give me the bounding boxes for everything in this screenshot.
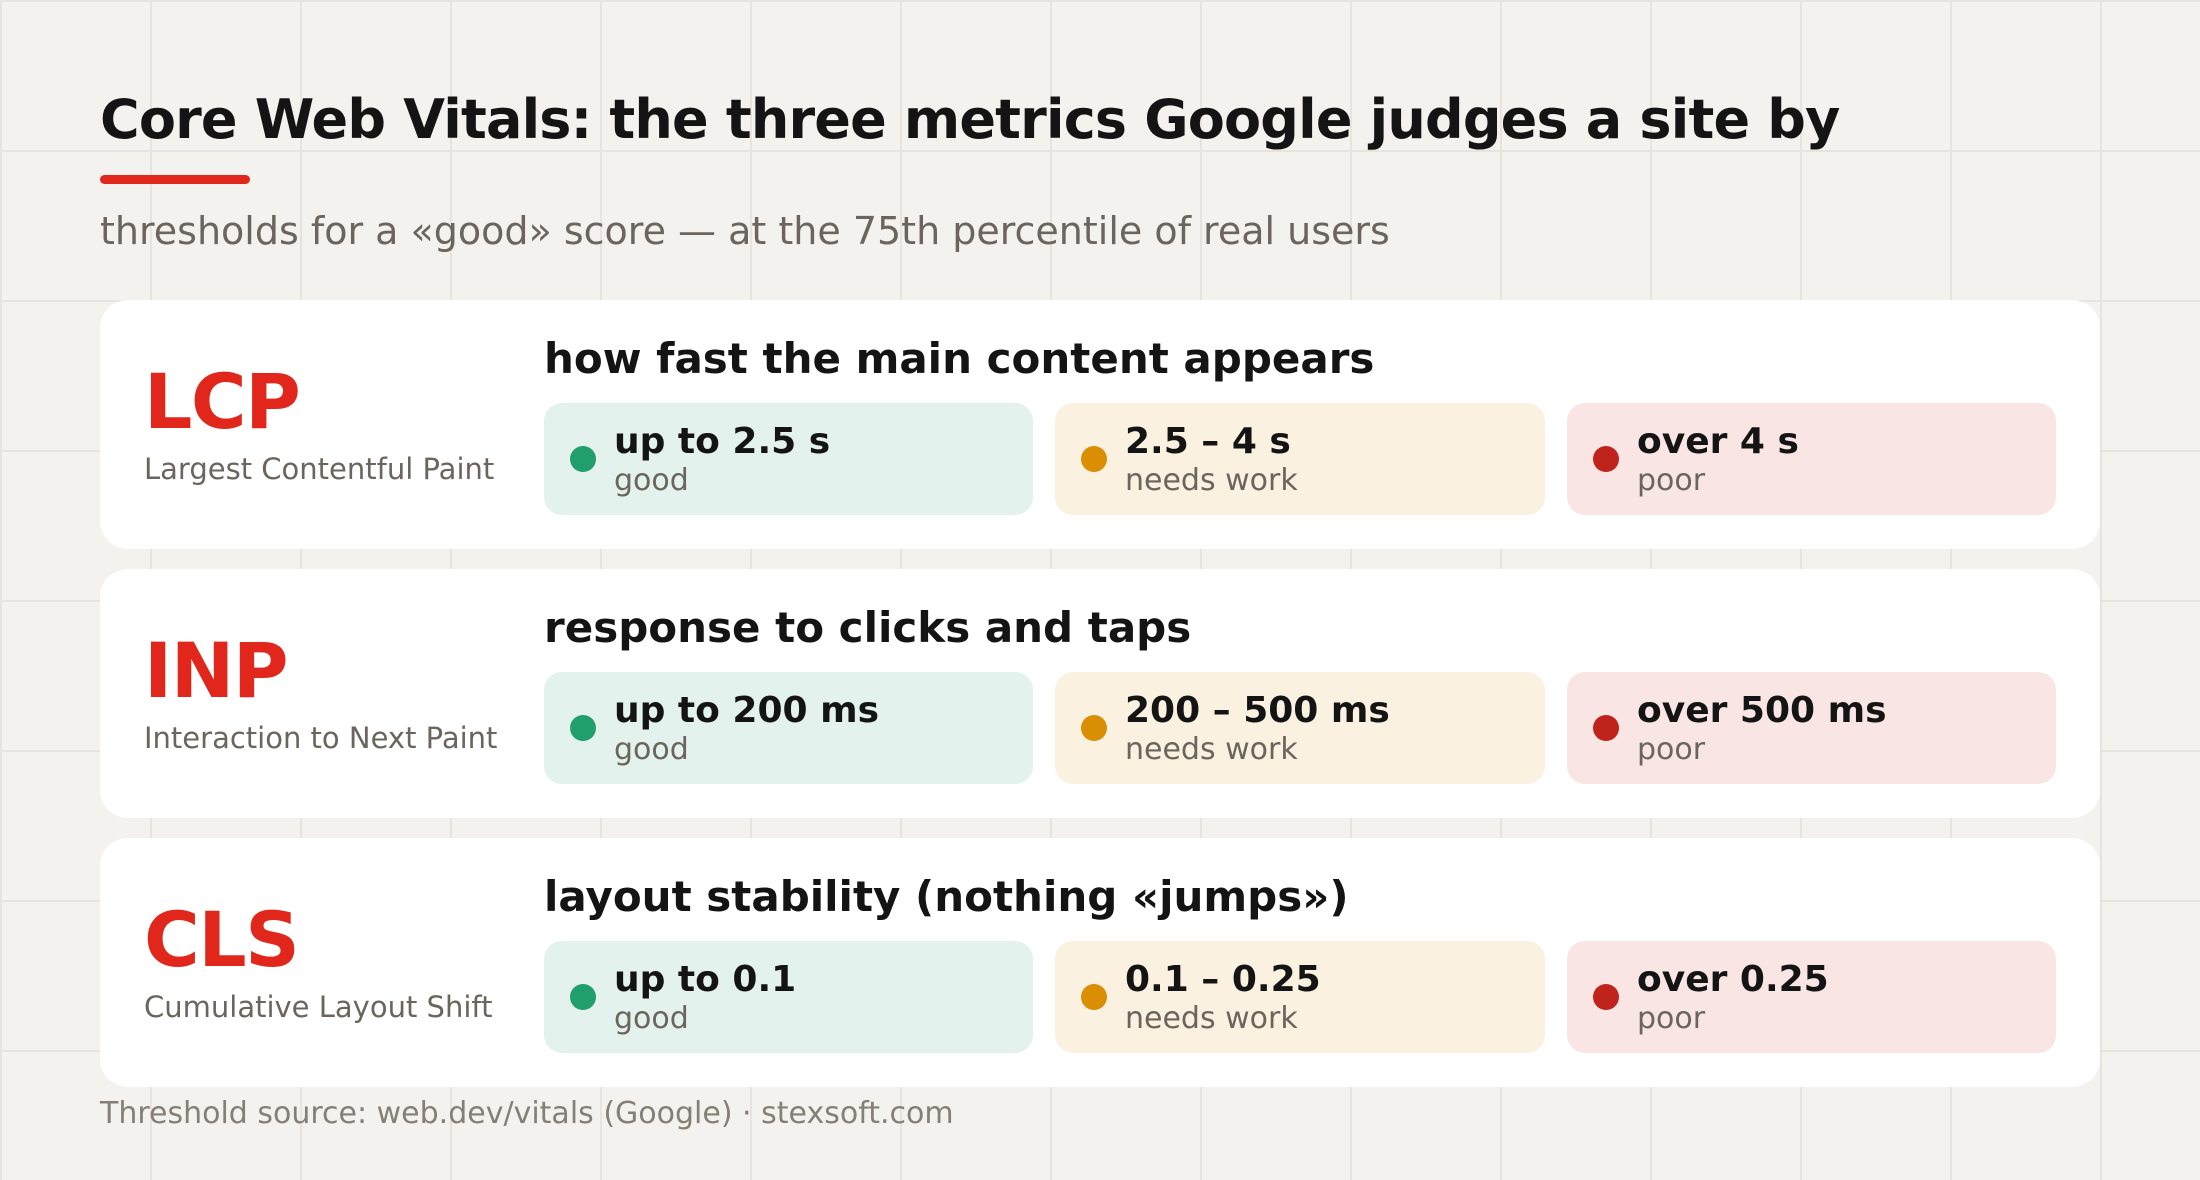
metric full name: Cumulative Layout Shift [144,990,492,1024]
panel: CLS [100,838,2100,1087]
threshold: poor: poor [1637,1001,1706,1036]
metric full name: Largest Contentful Paint [144,452,494,486]
threshold: needs work: needs work [1125,1001,1298,1036]
threshold: good [544,403,1033,515]
panel: LCP [100,300,2100,549]
subtitle: thresholds for a «good» score — at the 75th percentile of real users [100,209,1390,253]
title: Core Web Vitals: the three metrics Google judges a site by [100,88,1840,151]
threshold: good [544,672,1033,784]
threshold: needs work: 0.1 – 0.25 [1125,959,1321,1000]
threshold: needs work: 2.5 – 4 s [1125,421,1291,462]
threshold: poor: over 500 ms [1637,690,1887,731]
threshold: good: good [614,732,689,767]
metric name: LCP: LCP [144,357,299,446]
metric name: INP: INP [144,626,287,715]
panel: INP [100,569,2100,818]
threshold: needs work [1055,672,1545,784]
threshold: poor [1567,672,2056,784]
threshold: needs work [1055,941,1545,1053]
threshold: poor [1567,941,2056,1053]
footer source: Threshold source: web.dev/vitals (Google) · stexsoft.com [99,1096,954,1131]
threshold: poor: poor [1637,732,1706,767]
threshold: poor: poor [1637,463,1706,498]
threshold: good: up to 200 ms [614,690,879,731]
threshold: poor: over 0.25 [1637,959,1829,1000]
threshold: needs work [1055,403,1545,515]
threshold: poor [1567,403,2056,515]
threshold: poor: over 4 s [1637,421,1799,462]
threshold: needs work: needs work [1125,463,1298,498]
metric description: response to clicks and taps [544,603,1191,652]
threshold: needs work: 200 – 500 ms [1125,690,1390,731]
metric description: how fast the main content appears [544,334,1374,383]
title accent bar [100,175,250,184]
threshold: good: good [614,1001,689,1036]
threshold: good [544,941,1033,1053]
metric name: CLS: CLS [144,895,298,984]
threshold: good: good [614,463,689,498]
metric description: layout stability (nothing «jumps») [544,872,1349,921]
threshold: good: up to 0.1 [614,959,796,1000]
metric full name: Interaction to Next Paint [144,721,497,755]
threshold: needs work: needs work [1125,732,1298,767]
threshold: good: up to 2.5 s [614,421,830,462]
